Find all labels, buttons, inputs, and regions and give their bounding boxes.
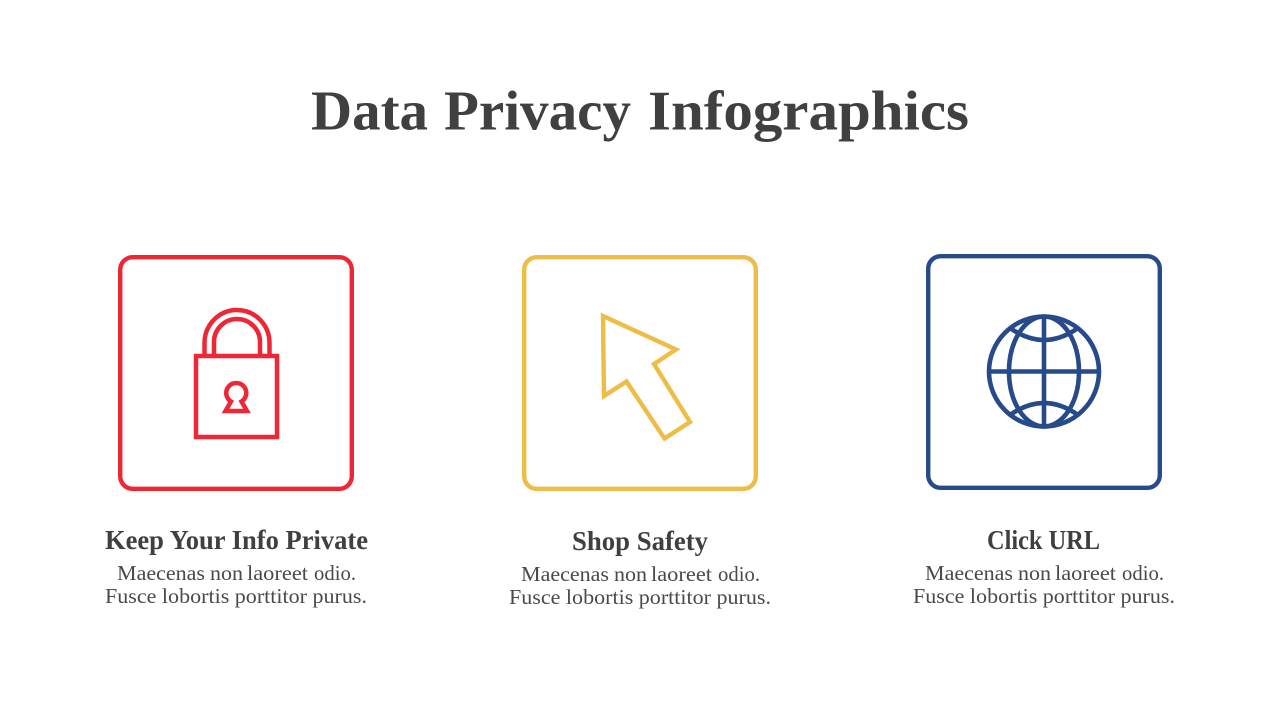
panel: click url (913, 256, 1175, 608)
panel: shop safety (509, 257, 771, 609)
title (311, 80, 969, 142)
card frame: red (120, 257, 352, 489)
body text: keep your info private: non (210, 561, 244, 585)
body text: click url: Fusce lobortis porttitor purus. (913, 584, 1175, 608)
body text: shop safety: laoreet (651, 562, 712, 586)
body text: keep your info private: laoreet (247, 561, 308, 585)
body text: shop safety: Fusce lobortis porttitor purus. (509, 585, 771, 609)
title: Data (311, 80, 428, 142)
body text: click url: laoreet (1055, 561, 1116, 585)
body text: click url: odio. (1122, 561, 1164, 585)
panel: keep your info private (105, 257, 368, 608)
card frame: yellow (524, 257, 756, 489)
heading: click url: Click URL (987, 525, 1100, 555)
card frame: blue (928, 256, 1160, 488)
body text: shop safety: odio. (718, 562, 760, 586)
icon: padlock (196, 310, 277, 437)
title: Infographics (648, 80, 969, 142)
title: Privacy (444, 80, 631, 142)
body text: click url: non (1018, 561, 1052, 585)
icon: cursor arrow (603, 316, 690, 438)
heading: keep your info private: Keep Your Info Private (105, 525, 368, 555)
body text: shop safety: non (614, 562, 648, 586)
body text: click url: Maecenas (925, 561, 1013, 585)
icon: globe (988, 316, 1100, 427)
body text: keep your info private: Maecenas (117, 561, 205, 585)
body text: shop safety (509, 562, 771, 609)
heading: shop safety: Shop Safety (572, 526, 708, 556)
body text: keep your info private: odio. (314, 561, 356, 585)
body text: keep your info private: Fusce lobortis porttitor purus. (105, 584, 367, 608)
body text: keep your info private (105, 561, 367, 608)
body text: click url (913, 561, 1175, 608)
body text: shop safety: Maecenas (521, 562, 609, 586)
